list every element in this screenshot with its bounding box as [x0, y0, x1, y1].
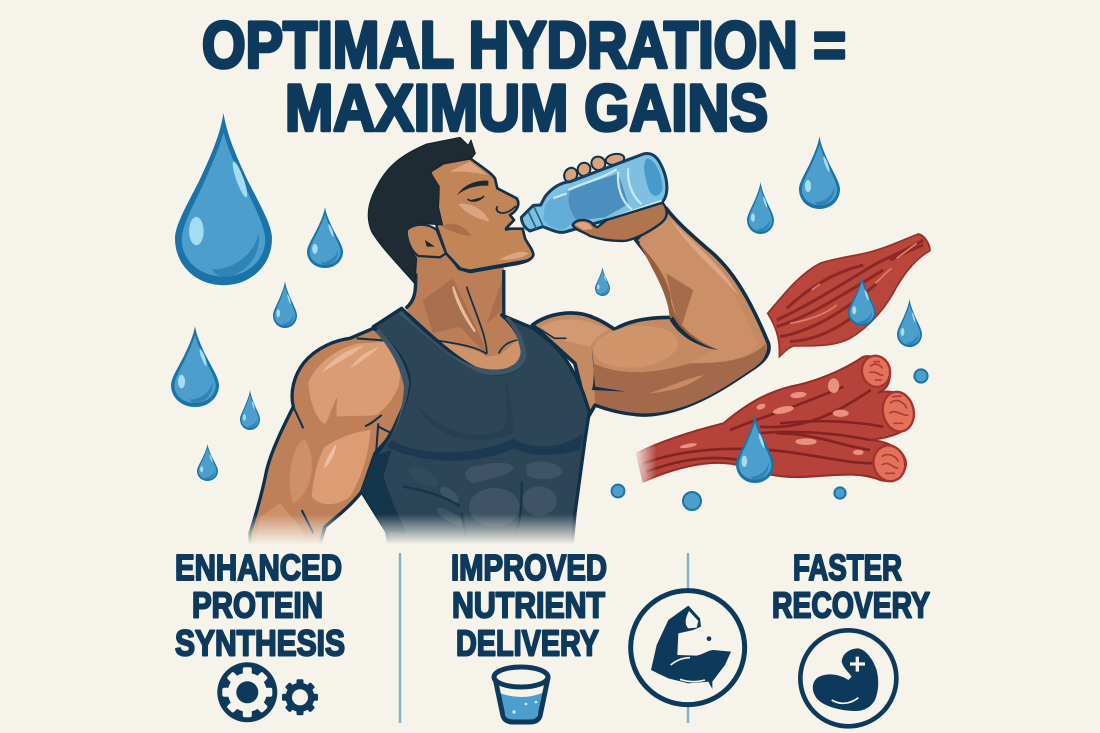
icon: flexed arm with water drop — [631, 591, 745, 705]
label: improved nutrient delivery: IMPROVED — [451, 547, 607, 588]
label: faster recovery — [772, 547, 930, 626]
dividers — [400, 553, 688, 723]
man: face — [430, 158, 533, 272]
man: near arm and shoulder — [250, 328, 409, 550]
muscle: whole belly — [768, 234, 930, 357]
title: OPTIMAL HYDRATION = — [202, 8, 846, 82]
label: enhanced protein synthesis — [175, 547, 345, 664]
man: hair — [368, 137, 475, 284]
label: improved nutrient delivery: DELIVERY — [456, 622, 599, 664]
title: MAXIMUM GAINS — [285, 70, 768, 144]
muscle: fibre grooves — [643, 387, 883, 472]
muscle: faded tail — [633, 433, 657, 487]
fingers — [562, 152, 625, 184]
icon: glass of water — [494, 667, 548, 722]
man: raised far arm — [533, 208, 769, 417]
muscle: highlights — [679, 378, 864, 455]
label: enhanced protein synthesis: PROTEIN — [192, 584, 323, 626]
muscle illustrations — [633, 234, 930, 487]
water drops: left side — [171, 113, 343, 481]
man: facial shading — [442, 162, 533, 273]
icon: gears — [217, 662, 318, 722]
label: improved nutrient delivery: NUTRIENT — [452, 584, 605, 626]
label: enhanced protein synthesis: SYNTHESIS — [175, 622, 345, 664]
label: faster recovery: RECOVERY — [772, 584, 930, 626]
water drops and dots: right side — [612, 136, 928, 510]
man: ear — [407, 225, 446, 257]
man: head — [368, 137, 667, 284]
small drop near the arm — [595, 267, 610, 296]
label: faster recovery: FASTER — [793, 547, 902, 588]
title — [202, 8, 846, 144]
icon: muscle with plus — [800, 630, 896, 726]
hand — [573, 203, 667, 241]
label: improved nutrient delivery — [451, 547, 607, 664]
muscle: fibre bundle silhouette — [637, 356, 914, 482]
man: fade at base of the figure — [245, 514, 585, 552]
label: enhanced protein synthesis: ENHANCED — [175, 547, 342, 588]
man: neck and chest — [406, 230, 533, 375]
man: tank top — [362, 308, 589, 550]
muscle: cut fibre ends — [858, 353, 917, 485]
bottle — [521, 154, 667, 232]
